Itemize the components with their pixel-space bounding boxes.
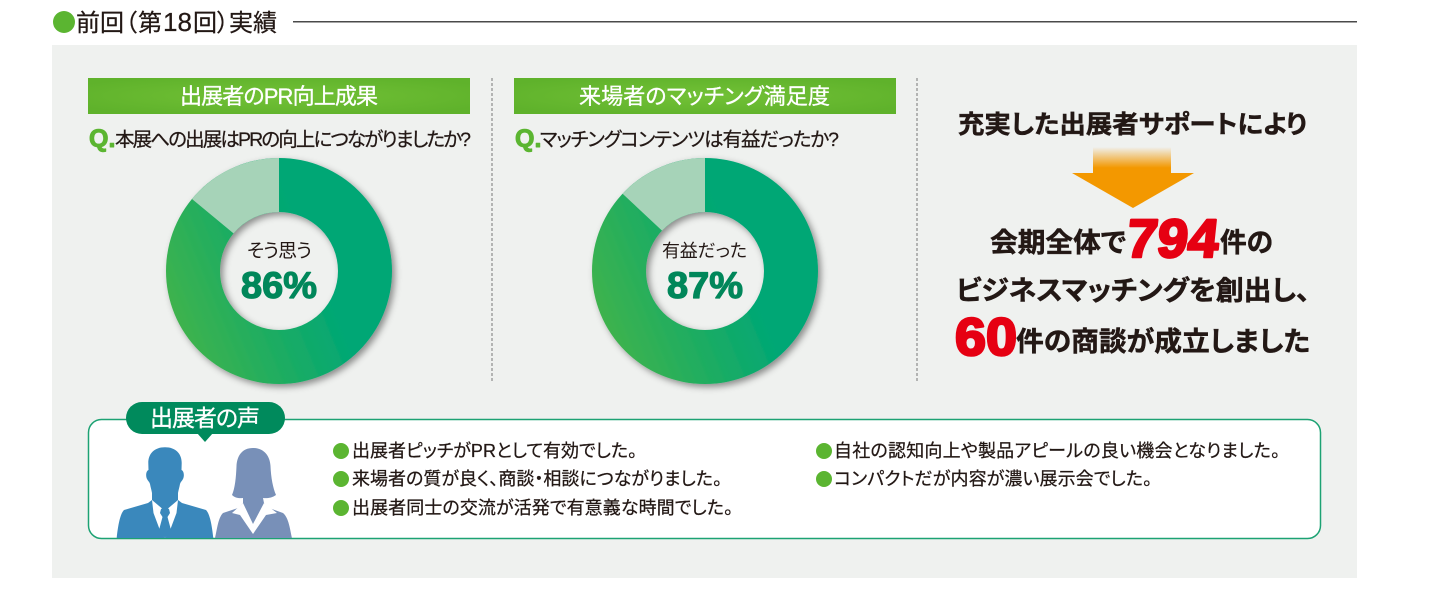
section heading: 前回 (76, 10, 124, 37)
panel: overall result message (955, 111, 1310, 367)
text: business matching created: ビジネスマッチングを創出し、 (956, 275, 1310, 306)
icon: businesswoman silhouette (215, 448, 292, 538)
text: 794 business matches: 794 (1124, 209, 1222, 269)
text: support lead-in: 充実した出展者サポートにより (958, 111, 1307, 139)
question: exhibitor PR: Q. (89, 125, 115, 153)
donut chart: 87%: 87% (667, 265, 743, 306)
text: 794 business matches: 件の (1220, 228, 1273, 258)
icon: businessman silhouette (117, 447, 213, 538)
heading bar: visitor matching (514, 78, 896, 114)
text: 60 deals closed: 60 (955, 308, 1017, 367)
badge: exhibitor voices (126, 402, 285, 442)
heading bar: exhibitor PR (88, 78, 470, 114)
donut chart: 86%: そう思う (247, 241, 312, 262)
list: voices left column: 出展者ピッチがPRとして有効でした。 (352, 441, 637, 461)
list: voices left column (333, 441, 733, 518)
list: voices right column: コンパクトだが内容が濃い展示会でした。 (834, 469, 1152, 489)
donut chart: 86% (166, 158, 392, 384)
section heading: （ (125, 10, 137, 37)
list: voices right column: 自社の認知向上や製品アピールの良い機会となりました。 (834, 441, 1280, 461)
text: 794 business matches (990, 209, 1273, 269)
list: voices left column: 来場者の質が良く、商談・相談につながりました。 (352, 469, 722, 489)
panel: visitor matching satisfaction (514, 78, 896, 384)
heading bar: visitor matching: 来場者のマッチング満足度 (579, 84, 830, 109)
question: exhibitor PR: 本展への出展はPRの向上につながりましたか? (115, 129, 471, 151)
section heading: 第 (138, 10, 162, 37)
list: voices left column: 出展者同士の交流が活発で有意義な時間でした。 (352, 498, 733, 518)
divider (916, 78, 918, 381)
text: 60 deals closed: 件の商談が成立しました (1016, 326, 1310, 357)
question: visitor matching: マッチングコンテンツは有益だったか? (540, 129, 839, 151)
donut chart: 87%: 有益だった (662, 241, 747, 261)
text: 60 deals closed (955, 308, 1310, 367)
heading bar: exhibitor PR: 出展者のPR向上成果 (180, 84, 378, 109)
donut chart: 86%: 86% (241, 265, 317, 306)
panel: exhibitor PR results (88, 78, 471, 384)
divider (491, 78, 493, 381)
section heading: 実績 (229, 10, 277, 37)
question: visitor matching: Q. (515, 125, 541, 153)
text: 794 business matches: 会期全体で (990, 228, 1126, 258)
section heading (53, 7, 1357, 37)
badge: exhibitor voices: 出展者の声 (150, 405, 260, 431)
panel: exhibitor voices (88, 402, 1320, 538)
section heading: ） (217, 10, 229, 37)
list: voices right column (816, 441, 1280, 489)
section heading: 18 (163, 7, 192, 37)
section heading: 回 (193, 10, 217, 37)
arrow: down (1072, 147, 1194, 208)
donut chart: 87% (592, 158, 818, 384)
